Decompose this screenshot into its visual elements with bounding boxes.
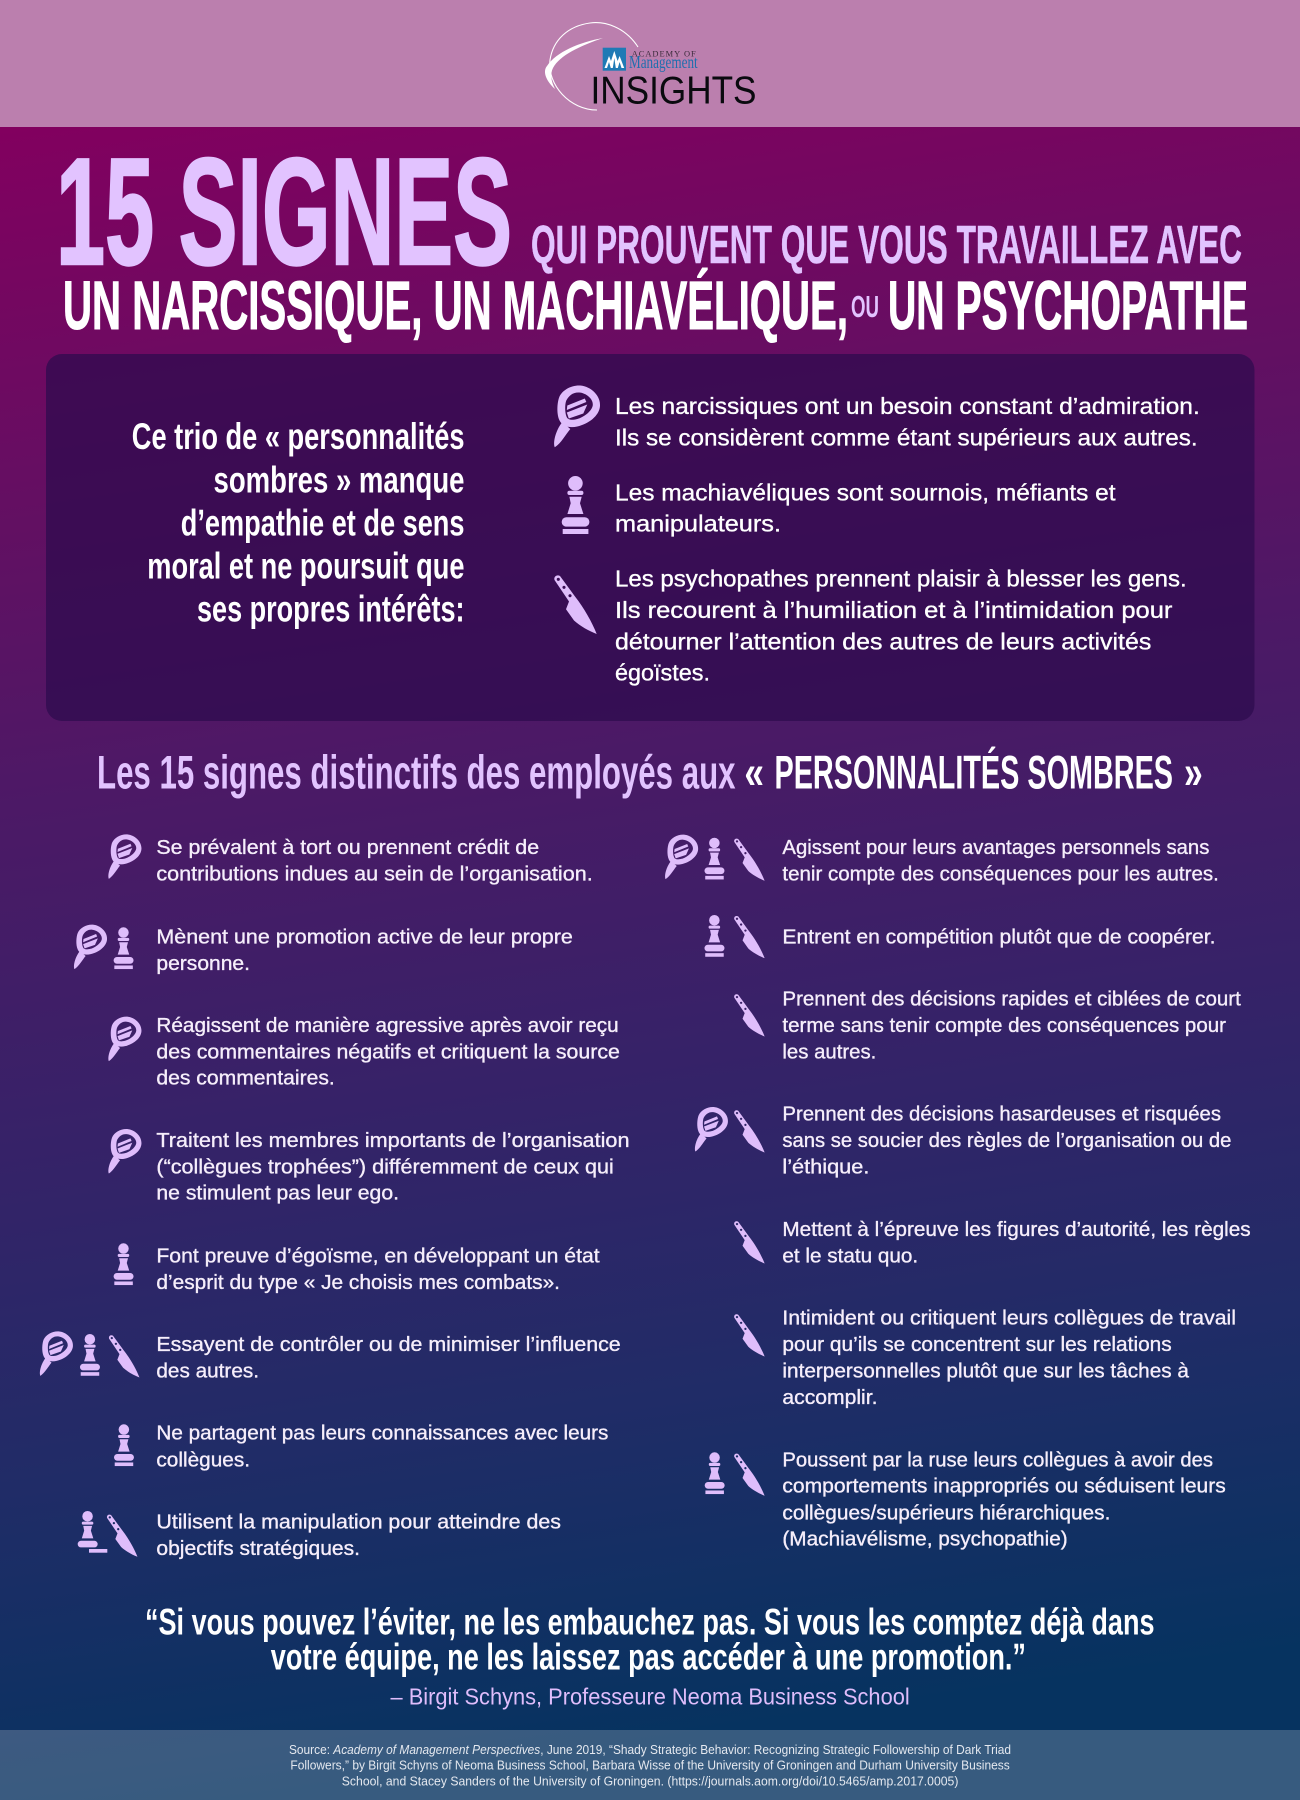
sign 2: personne. <box>156 952 250 975</box>
psychopaths description: Ils recourent à l’humiliation et à l’intimidation pour <box>615 597 1173 623</box>
narcissists description: Ils se considèrent comme étant supérieurs aux autres. <box>615 424 1198 450</box>
footer band <box>0 1730 1300 1800</box>
sign 8: objectifs stratégiques. <box>156 1537 360 1560</box>
sign 2 <box>74 925 573 975</box>
narcissists description <box>615 393 1200 450</box>
sign 12: sans se soucier des règles de l’organisation ou de <box>782 1129 1231 1152</box>
sign 14 <box>734 1307 1236 1409</box>
psychopaths description: égoïstes. <box>615 660 710 686</box>
sign 14: interpersonnelles plutôt que sur les tâches à <box>782 1360 1190 1383</box>
sign 3: des commentaires négatifs et critiquent la source <box>156 1040 620 1063</box>
sign 6 <box>40 1331 621 1383</box>
machiavellians description: Les machiavéliques sont sournois, méfiants et <box>615 479 1116 505</box>
sign 5: Font preuve d’égoïsme, en développant un état <box>156 1245 600 1268</box>
sign 13: Mettent à l’épreuve les figures d’autorité, les règles <box>782 1218 1251 1241</box>
sign 9 <box>665 835 1219 886</box>
sign 15 <box>705 1448 1226 1551</box>
machiavellians description: manipulateurs. <box>615 511 781 537</box>
left column of signs <box>40 834 629 1560</box>
sign 7 <box>114 1422 608 1471</box>
logo management text: Management <box>629 52 698 72</box>
icon: pawn <box>562 476 589 534</box>
sign 15: Poussent par la ruse leurs collègues à avoir des <box>782 1448 1213 1471</box>
source text <box>289 1743 1011 1788</box>
sign 8 <box>78 1511 561 1560</box>
machiavellians description <box>615 479 1116 537</box>
sign 12: Prennent des décisions hasardeuses et risquées <box>782 1103 1221 1126</box>
sign 1: Se prévalent à tort ou prennent crédit de <box>156 836 539 859</box>
sign 9: Agissent pour leurs avantages personnels sans <box>782 836 1209 859</box>
sign 3: Réagissent de manière agressive après avoir reçu <box>156 1014 619 1037</box>
logo swoosh <box>545 23 638 110</box>
sign 5: d’esprit du type « Je choisis mes combats». <box>156 1271 560 1294</box>
sign 14: Intimident ou critiquent leurs collègues de travail <box>782 1307 1236 1330</box>
sign 15: (Machiavélisme, psychopathie) <box>782 1528 1068 1551</box>
sign 13: et le statu quo. <box>782 1244 918 1267</box>
sign 13 <box>734 1218 1251 1267</box>
sign 14: pour qu’ils se concentrent sur les relations <box>782 1333 1172 1356</box>
quote line 2: votre équipe, ne les laissez pas accéder à une promotion.” <box>271 1636 1026 1677</box>
panel intro text: d’empathie et de sens <box>181 502 464 544</box>
panel: dark triad definitions <box>46 354 1254 721</box>
sign 6: Essayent de contrôler ou de minimiser l’influence <box>156 1333 621 1356</box>
sign 15: comportements inappropriés ou séduisent leurs <box>782 1475 1226 1498</box>
sign 15: collègues/supérieurs hiérarchiques. <box>782 1501 1110 1524</box>
title <box>56 127 1248 344</box>
sign 14: accomplir. <box>782 1386 878 1409</box>
heading lilac part: Les 15 signes distinctifs des employés aux <box>97 746 736 798</box>
psychopaths description: Les psychopathes prennent plaisir à blesser les gens. <box>615 566 1187 592</box>
panel intro text: ses propres intérêts: <box>197 589 464 630</box>
header band <box>0 0 1300 127</box>
sign 4: ne stimulent pas leur ego. <box>156 1182 399 1204</box>
sign 7: Ne partagent pas leurs connaissances avec leurs <box>156 1422 608 1445</box>
sign 10: Entrent en compétition plutôt que de coopérer. <box>782 926 1216 948</box>
sign 4: Traitent les membres importants de l’organisation <box>156 1129 630 1152</box>
source text: Followers,” by Birgit Schyns of Neoma Business School, Barbara Wisse of the University of Groningen and Durham University Business <box>290 1759 1010 1773</box>
sign 3 <box>108 1014 620 1090</box>
logo insights wordmark: INSIGHTS <box>590 69 756 112</box>
sign 7: collègues. <box>156 1448 250 1471</box>
icon: knife <box>554 575 597 634</box>
sign 4 <box>108 1129 629 1204</box>
sign 4: (“collègues trophées”) différemment de ceux qui <box>156 1155 614 1178</box>
sign 11: les autres. <box>782 1040 876 1064</box>
icon: mirror <box>554 385 600 447</box>
psychopaths description <box>615 566 1187 686</box>
sign 11: Prennent des décisions rapides et ciblées de court <box>782 988 1241 1011</box>
sign 1 <box>108 834 593 886</box>
source text: School, and Stacey Sanders of the University of Groningen. (https://journals.aom.org/doi/10.5465/amp.2017.0005) <box>342 1774 958 1788</box>
panel background <box>46 354 1254 721</box>
sign 5 <box>114 1243 600 1294</box>
logo academy text: ACADEMY OF <box>632 49 697 59</box>
quote attribution: – Birgit Schyns, Professeure Neoma Business School <box>390 1683 910 1709</box>
sign 6: des autres. <box>156 1360 259 1383</box>
psychopaths description: détourner l’attention des autres de leurs activités <box>615 628 1151 654</box>
panel intro text: moral et ne poursuit que <box>147 546 464 586</box>
panel intro text: Ce trio de « personnalités <box>132 416 464 457</box>
logo: Academy of Management Insights <box>545 23 756 112</box>
sign 1: contributions indues au sein de l’organisation. <box>156 862 593 886</box>
sign 3: des commentaires. <box>156 1067 335 1090</box>
sign 12: l’éthique. <box>782 1155 869 1178</box>
title: 15 signes: 15 SIGNES <box>56 127 512 297</box>
sign 2: Mènent une promotion active de leur propre <box>156 925 573 948</box>
title: ou: OU <box>851 289 879 324</box>
quote <box>145 1601 1154 1709</box>
sign 12 <box>695 1103 1231 1178</box>
sign 11 <box>734 988 1241 1064</box>
logo blue square <box>603 48 626 71</box>
sign 10 <box>704 915 1216 958</box>
panel intro text: sombres » manque <box>214 460 464 501</box>
right column of signs <box>665 835 1251 1551</box>
section heading <box>97 746 1203 798</box>
source text: Source: Academy of Management Perspectives, June 2019, “Shady Strategic Behavior: Recognizing Strategic Followership of Dark Triad <box>289 1743 1011 1757</box>
narcissists description: Les narcissiques ont un besoin constant d’admiration. <box>615 393 1200 419</box>
sign 9: tenir compte des conséquences pour les autres. <box>782 863 1219 886</box>
heading white part: » <box>1184 746 1203 798</box>
panel intro text <box>132 416 464 630</box>
sign 8: Utilisent la manipulation pour atteindre des <box>156 1511 561 1534</box>
sign 11: terme sans tenir compte des conséquences pour <box>782 1014 1226 1037</box>
heading white part: « <box>744 746 764 798</box>
